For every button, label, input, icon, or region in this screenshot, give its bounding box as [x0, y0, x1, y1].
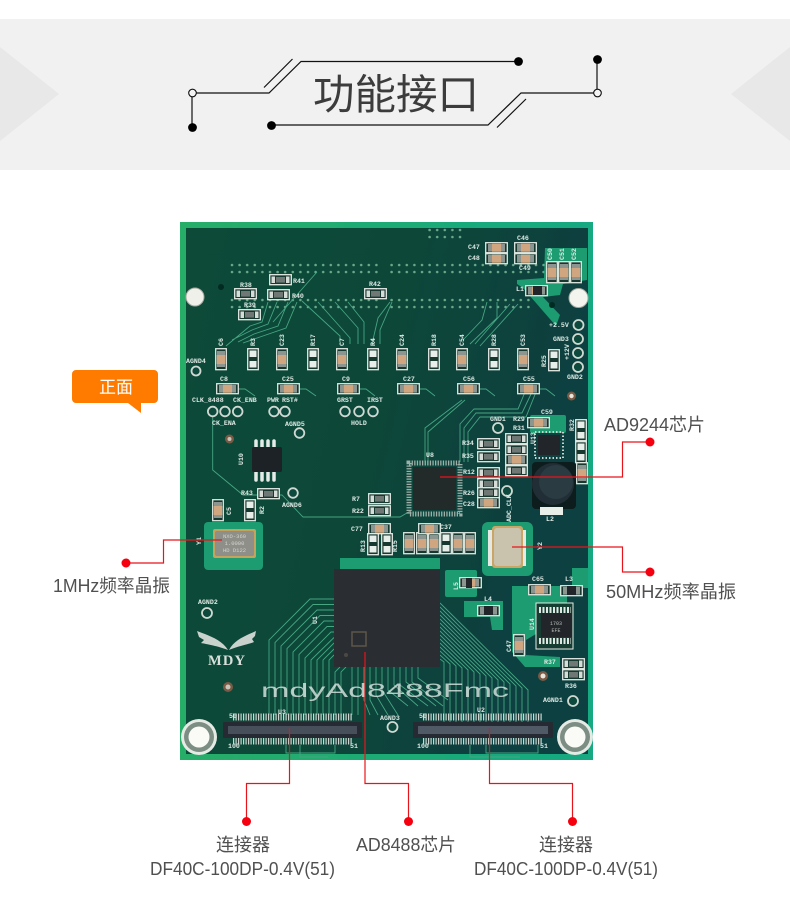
silkscreen labels: ADC_CLK	[506, 494, 513, 522]
silkscreen labels: R32	[569, 419, 576, 431]
silkscreen labels: R22	[352, 508, 364, 515]
silkscreen labels: AGND5	[285, 421, 305, 428]
silkscreen labels: HOLD	[351, 420, 367, 427]
callout: 1MHz crystal: 1MHz频率晶振	[53, 576, 170, 596]
silkscreen labels: C8	[220, 376, 228, 383]
silkscreen labels: R26	[463, 490, 475, 497]
silkscreen labels: GND2	[567, 374, 583, 381]
silkscreen labels: R38	[240, 282, 252, 289]
callout: 1MHz crystal	[53, 540, 222, 596]
MDY logo	[197, 631, 256, 669]
silkscreen labels: GND1	[490, 416, 506, 423]
silkscreen labels: R4	[370, 338, 377, 346]
silkscreen labels: R29	[513, 416, 525, 423]
silkscreen labels: R41	[293, 278, 305, 285]
silkscreen labels: 50	[419, 713, 427, 720]
middle signal traces	[364, 667, 448, 715]
title circuit ornament	[188, 55, 602, 132]
left signal fan	[269, 599, 358, 715]
callout: left connector: 连接器	[216, 835, 270, 855]
mounting holes	[181, 284, 593, 755]
board surface	[186, 228, 588, 754]
regulator U14: 1703	[550, 621, 562, 627]
silkscreen labels: AGND6	[282, 502, 302, 509]
silkscreen labels: C23	[279, 334, 286, 346]
via rows	[230, 228, 545, 312]
silkscreen labels: R39	[244, 302, 256, 309]
silkscreen labels: L2	[546, 516, 554, 523]
silkscreen labels: RST#	[282, 397, 298, 404]
silkscreen labels: C49	[519, 265, 531, 272]
silkscreen labels: 100	[228, 743, 240, 750]
test points	[192, 320, 584, 732]
board name silkscreen: mdyAd8488Fmc	[261, 681, 509, 702]
connector U2	[413, 717, 553, 741]
chip U13	[535, 432, 563, 458]
silkscreen labels: R17	[310, 334, 317, 346]
silkscreen labels: L1	[516, 286, 524, 293]
silkscreen labels: C28	[463, 501, 475, 508]
chip U10	[252, 441, 282, 480]
silkscreen labels: C52	[571, 248, 578, 260]
callout: right connector	[474, 728, 658, 879]
silkscreen labels: C53	[520, 334, 527, 346]
silkscreen labels: C59	[541, 409, 553, 416]
silkscreen labels: C5	[226, 507, 233, 515]
silkscreen labels: R28	[491, 334, 498, 346]
silkscreen labels: U14	[529, 618, 536, 630]
callout: 50MHz crystal	[512, 547, 736, 602]
crystal Y2	[488, 526, 526, 568]
silkscreen labels: L5	[453, 582, 460, 590]
silkscreen labels: R3	[250, 338, 257, 346]
crystal Y1	[213, 529, 256, 558]
silkscreen labels: GND3	[553, 336, 569, 343]
silkscreen labels: U3	[278, 709, 286, 716]
silkscreen labels: C27	[403, 376, 415, 383]
silkscreen labels: R34	[462, 440, 474, 447]
regulator U14	[536, 603, 573, 649]
silkscreen labels: L4	[484, 596, 492, 603]
crystal Y1: NXO-360	[223, 533, 246, 540]
silkscreen labels: U10	[238, 453, 245, 465]
resistors and capacitors	[213, 243, 587, 680]
callout: AD8488 chip	[356, 652, 456, 855]
silkscreen labels: C24	[399, 334, 406, 346]
callout: AD9244 chip	[440, 415, 705, 477]
callout: left connector: DF40C-100DP-0.4V(51)	[150, 859, 335, 879]
silkscreen labels: R13	[360, 540, 367, 552]
silkscreen labels: Y1	[196, 537, 203, 545]
connector U3	[223, 717, 362, 741]
silkscreen labels: C48	[468, 255, 480, 262]
inductors L3 L4 L5	[466, 286, 576, 615]
silkscreen labels: U13	[530, 432, 537, 444]
silkscreen labels: R36	[565, 683, 577, 690]
silkscreen labels: AGND1	[543, 697, 563, 704]
silkscreen labels: CK_ENB	[233, 397, 257, 404]
callout tag: front side	[72, 370, 158, 413]
silkscreen labels: C47	[506, 640, 513, 652]
silkscreen labels: R43	[241, 490, 253, 497]
silkscreen labels: 50	[229, 713, 237, 720]
silkscreen labels: U2	[477, 707, 485, 714]
silkscreen labels: C54	[459, 334, 466, 346]
silkscreen labels: +12V	[564, 344, 571, 360]
silkscreen labels: C9	[342, 376, 350, 383]
silkscreen labels: C7	[339, 338, 346, 346]
callout: right connector: 连接器	[539, 835, 593, 855]
silkscreen labels: C47	[468, 244, 480, 251]
right arrow decoration	[731, 47, 790, 141]
callout: AD8488 chip: AD8488芯片	[356, 835, 456, 855]
silkscreen labels: C37	[440, 524, 452, 531]
regulator U14: EFE	[551, 628, 561, 634]
silkscreen labels: R18	[431, 334, 438, 346]
crystal Y1: 1.0000	[225, 540, 244, 547]
silkscreen labels: R35	[462, 453, 474, 460]
crystal Y1: HD D122	[223, 547, 246, 554]
silkscreen labels: C51	[559, 248, 566, 260]
silkscreen labels: C6	[218, 338, 225, 346]
MDY logo: MDY	[208, 653, 246, 669]
silkscreen labels: C65	[532, 576, 544, 583]
silkscreen labels: L3	[565, 576, 573, 583]
silkscreen labels: R15	[392, 540, 399, 552]
silkscreen labels: GRST	[337, 397, 353, 404]
callout: 50MHz crystal: 50MHz频率晶振	[606, 582, 736, 602]
silkscreen labels: U8	[426, 452, 434, 459]
silkscreen labels: R7	[352, 496, 360, 503]
silkscreen labels: C77	[351, 526, 363, 533]
silkscreen labels: +2.5V	[549, 322, 569, 329]
silkscreen labels: C46	[517, 235, 529, 242]
silkscreen labels: CLK_8488	[192, 397, 224, 404]
silkscreen labels: U1	[312, 616, 319, 624]
silkscreen labels	[186, 235, 583, 750]
board traces	[213, 272, 555, 757]
silkscreen labels: PWR	[267, 397, 279, 404]
silkscreen labels: 51	[540, 743, 548, 750]
right signal fan	[440, 603, 528, 722]
callout: right connector: DF40C-100DP-0.4V(51)	[474, 859, 658, 879]
board edge	[180, 222, 593, 760]
silkscreen labels: C55	[523, 376, 535, 383]
silkscreen labels: R37	[544, 659, 556, 666]
chip U8	[409, 463, 460, 514]
silkscreen labels: R2	[259, 506, 266, 514]
silkscreen labels: R12	[463, 469, 475, 476]
callout: AD9244 chip: AD9244芯片	[604, 415, 705, 435]
silkscreen labels: 51	[350, 743, 358, 750]
silkscreen labels: R40	[292, 293, 304, 300]
silkscreen labels: C25	[282, 376, 294, 383]
silkscreen labels: AGND3	[380, 715, 400, 722]
silkscreen labels: CK_ENA	[212, 420, 236, 427]
silkscreen labels: Y2	[537, 542, 544, 550]
silkscreen labels: 100	[417, 743, 429, 750]
panel: circuit board	[180, 222, 593, 760]
left arrow decoration	[0, 47, 59, 141]
silkscreen labels: R31	[513, 425, 525, 432]
callout tag: front side: 正面	[99, 378, 133, 397]
silkscreen labels: AGND2	[198, 599, 218, 606]
main chip AD8488	[334, 569, 440, 667]
silkscreen labels: R25	[541, 355, 548, 367]
title: 功能接口	[313, 71, 479, 118]
silkscreen labels: R42	[369, 281, 381, 288]
silkscreen labels: C56	[463, 376, 475, 383]
callout: left connector	[150, 728, 335, 879]
silkscreen labels: C50	[547, 248, 554, 260]
header band	[0, 19, 790, 170]
copper pours	[204, 248, 588, 667]
inductor L2	[532, 462, 576, 515]
silkscreen labels: IRST	[367, 397, 383, 404]
silkscreen labels: AGND4	[186, 358, 206, 365]
